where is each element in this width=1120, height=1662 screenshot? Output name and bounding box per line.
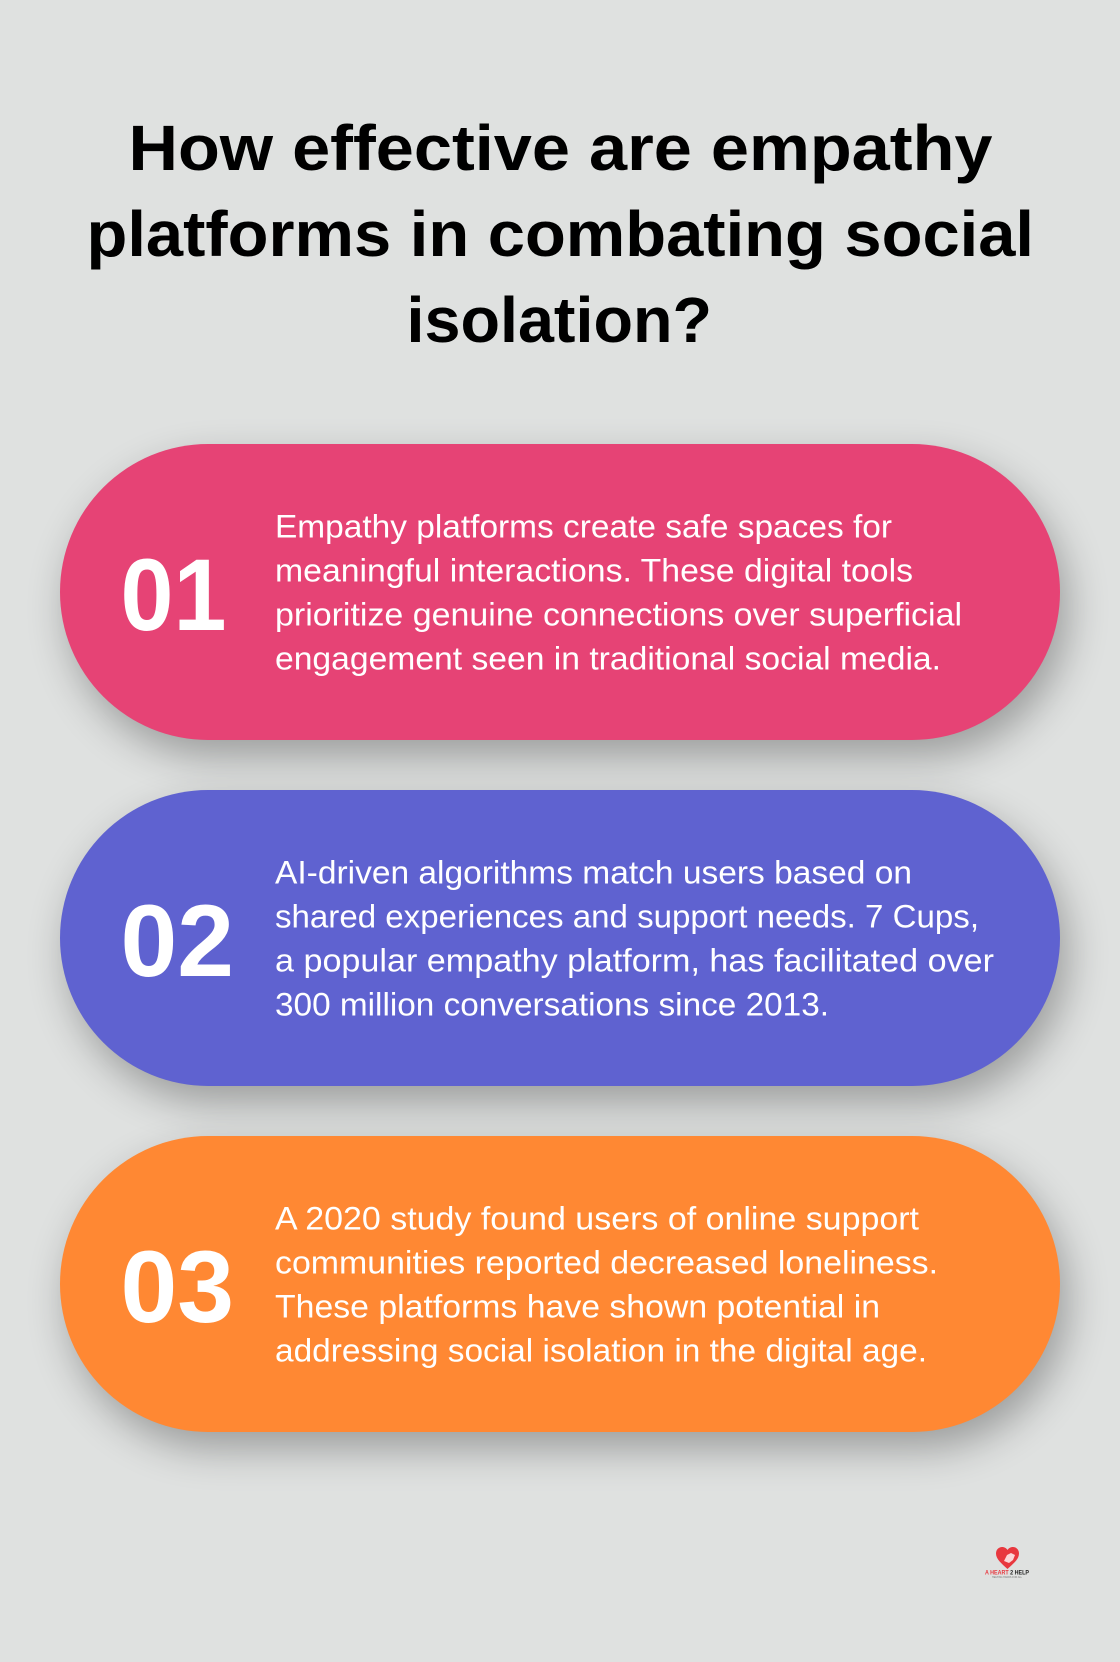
text block: step 03: addressing social isolation in the digital age. xyxy=(275,1332,927,1368)
panel: step 03 xyxy=(60,1136,1060,1432)
panel: step 02 xyxy=(60,790,1060,1086)
text block: step 02: 300 million conversations since 2013. xyxy=(275,986,829,1022)
text block: step 02: a popular empathy platform, has facilitated over xyxy=(275,942,994,978)
text block: step 03: A 2020 study found users of online support xyxy=(275,1200,919,1236)
number 03: 03 xyxy=(120,1230,234,1344)
text block: step 01 xyxy=(275,508,962,676)
text block: step 03 xyxy=(275,1200,938,1368)
text block: step 02: AI-driven algorithms match users based on xyxy=(275,854,912,890)
text block: step 03: These platforms have shown potential in xyxy=(275,1288,880,1324)
text block: step 02 xyxy=(275,854,994,1022)
number 02: 02 xyxy=(120,884,234,998)
title: platforms in combating social xyxy=(86,198,1034,270)
panel: step 01 xyxy=(60,444,1060,740)
title: How effective are empathy xyxy=(128,112,993,184)
logo wordmark: A HEART 2 HELP xyxy=(985,1570,1029,1576)
logo: A Heart 2 Help xyxy=(985,1547,1029,1579)
logo tagline: HELPING HANDS FOR ALL xyxy=(992,1576,1023,1579)
title xyxy=(86,112,1034,356)
title: isolation? xyxy=(406,284,712,356)
number 01: 01 xyxy=(120,538,226,652)
text block: step 03: communities reported decreased loneliness. xyxy=(275,1244,938,1280)
text block: step 01: meaningful interactions. These digital tools xyxy=(275,552,913,588)
text block: step 01: prioritize genuine connections over superficial xyxy=(275,596,962,632)
icon: heart with hand xyxy=(996,1547,1019,1569)
text block: step 01: Empathy platforms create safe spaces for xyxy=(275,508,892,544)
text block: step 01: engagement seen in traditional social media. xyxy=(275,640,941,676)
text block: step 02: shared experiences and support needs. 7 Cups, xyxy=(275,898,979,934)
